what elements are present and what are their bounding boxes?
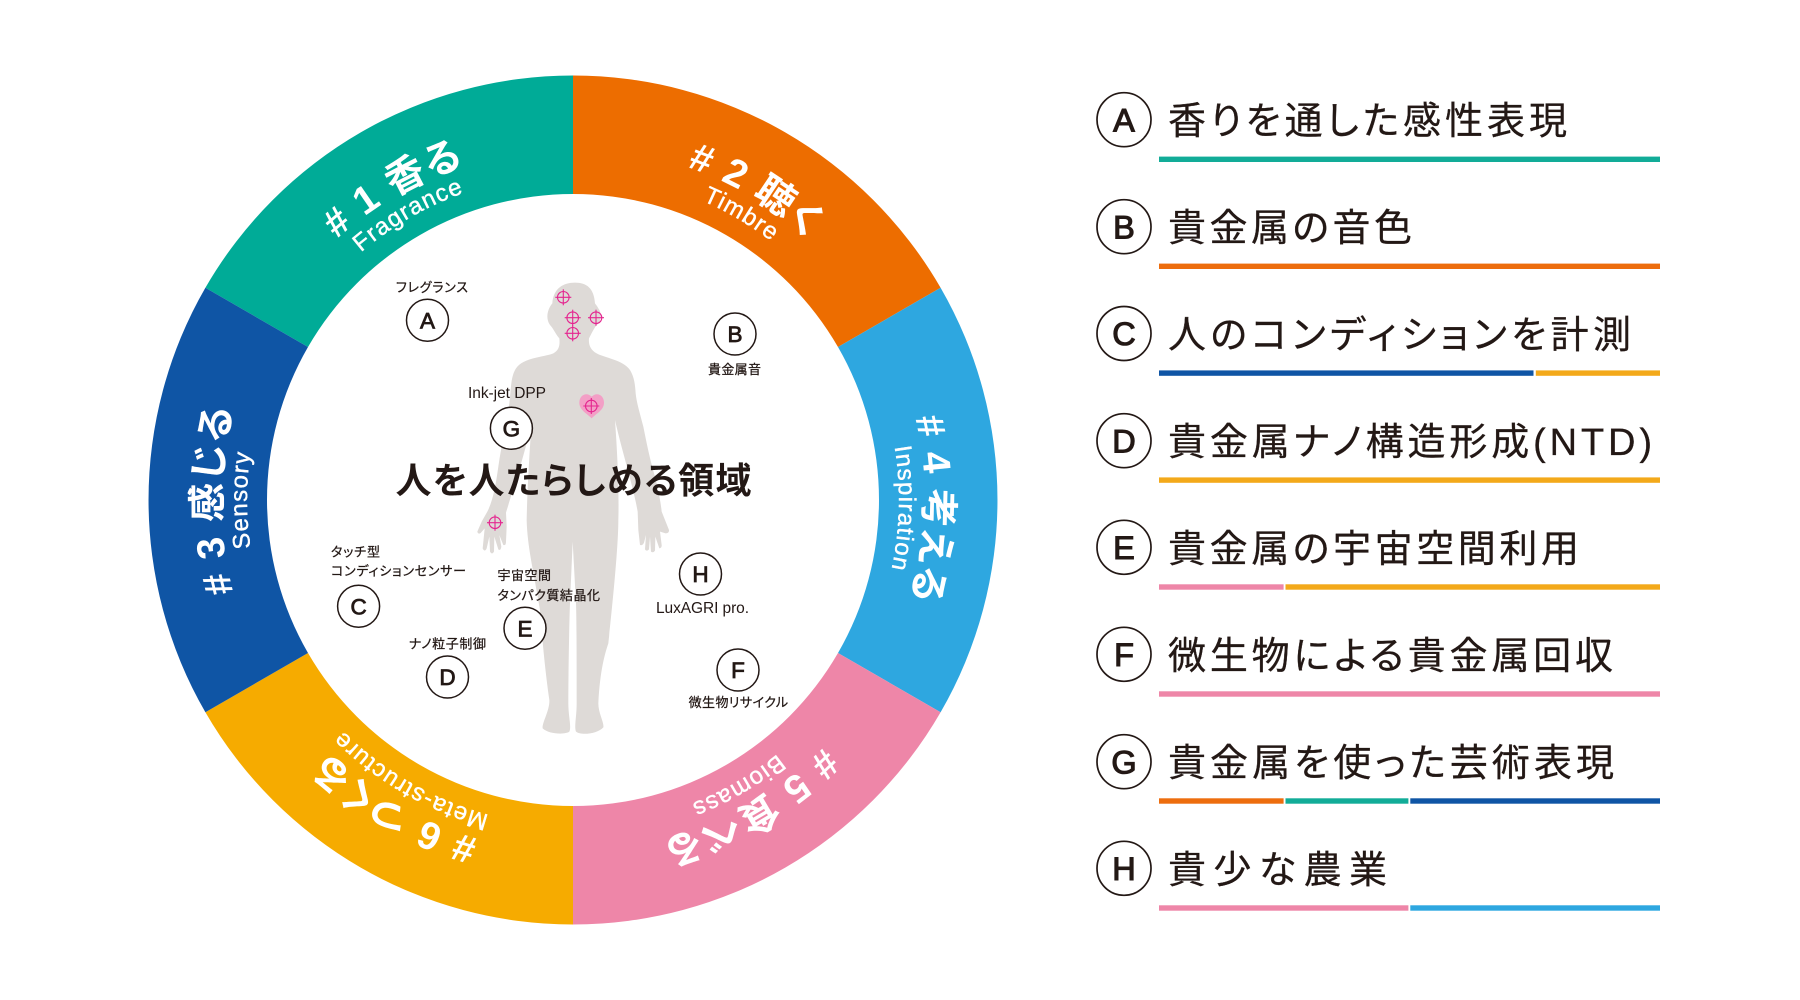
marker D: ナノ粒子制御 (409, 636, 486, 652)
legend row G (1097, 735, 1660, 804)
marker B: 貴金属音 (708, 362, 761, 377)
legend row H: 貴少な農業 (1168, 850, 1387, 892)
heart mark (579, 394, 604, 418)
segment label: #4 Inspiration: # 4 考える (912, 416, 958, 598)
legend row E: E (1113, 530, 1135, 566)
segment label: #1 Fragrance: # 1 香る (326, 140, 458, 238)
marker H: H (692, 562, 709, 587)
marker E: タンパク質結晶化 (498, 588, 600, 603)
legend row A: A (1113, 102, 1135, 138)
marker D (409, 636, 486, 698)
legend row E (1097, 520, 1660, 590)
segment label: #3 Sensory: # 3 感じる (188, 410, 233, 595)
marker A: A (420, 308, 435, 333)
marker G (468, 385, 546, 449)
marker C: タッチ型 (331, 544, 380, 560)
target crosshairs on body (487, 289, 604, 531)
marker F: 微生物リサイクル (689, 695, 788, 710)
legend row B: 貴金属の音色 (1168, 208, 1412, 250)
segment label: #3 Sensory: Sensory (232, 451, 254, 548)
legend row B (1097, 200, 1660, 269)
segment label: #6 Meta-structure: # 6 つくる (314, 758, 476, 862)
legend row C: C (1112, 316, 1136, 352)
legend row F: F (1114, 637, 1134, 673)
marker G: Ink-jet DPP (468, 385, 546, 402)
ring segment 4: light blue (838, 288, 997, 712)
human body silhouette (477, 283, 669, 734)
marker E: 宇宙空間 (498, 568, 551, 583)
segment label: #5 Biomass: Biomass (693, 754, 786, 814)
ring segment 1: teal (205, 76, 573, 347)
marker C (331, 544, 466, 627)
legend row G: G (1111, 744, 1137, 780)
legend row C (1097, 306, 1660, 376)
marker G: G (503, 416, 520, 441)
marker C: C (350, 594, 367, 619)
marker E: E (517, 616, 533, 641)
legend row B: B (1113, 209, 1135, 245)
ring segment 3: blue (149, 288, 308, 712)
legend row E: 貴金属の宇宙空間利用 (1168, 529, 1579, 571)
legend row G: 貴金属を使った芸術表現 (1168, 743, 1614, 785)
segment label: #1 Fragrance: Fragrance (352, 182, 462, 252)
legend row D: D (1112, 423, 1136, 459)
marker F (689, 649, 788, 710)
title: 人を人たらしめる領域 (396, 460, 752, 501)
legend row H: H (1112, 851, 1136, 887)
marker H (656, 553, 749, 617)
segment label: #5 Biomass: # 5 食べる (668, 748, 836, 867)
marker A (396, 280, 468, 341)
ring segment 2: orange (573, 76, 941, 347)
ring segment 5: pink (573, 653, 941, 924)
legend row A (1097, 93, 1660, 162)
ring of six senses (149, 76, 997, 924)
legend row C: 人のコンディションを計測 (1168, 315, 1631, 357)
legend row D: 貴金属ナノ構造形成(NTD) (1168, 422, 1652, 464)
segment label: #6 Meta-structure: Meta-structure (336, 733, 488, 831)
marker B (708, 313, 761, 377)
segment label: #4 Inspiration: Inspiration (892, 446, 917, 570)
legend row D (1097, 414, 1660, 483)
marker C: コンディションセンサー (331, 564, 466, 578)
marker H: LuxAGRI pro. (656, 600, 749, 617)
segment label: #2 Timbre: Timbre (708, 186, 776, 239)
legend row F: 微生物による貴金属回収 (1168, 636, 1613, 678)
marker B: B (727, 322, 743, 347)
legend row F (1097, 627, 1660, 697)
marker F: F (731, 658, 745, 683)
ring segment 6: yellow (205, 653, 573, 924)
marker A: フレグランス (396, 280, 468, 295)
segment label: #2 Timbre: # 2 聴く (689, 144, 823, 235)
legend row H (1097, 841, 1660, 911)
legend row A: 香りを通した感性表現 (1168, 101, 1567, 143)
marker E (498, 568, 600, 649)
marker D: D (439, 665, 456, 690)
